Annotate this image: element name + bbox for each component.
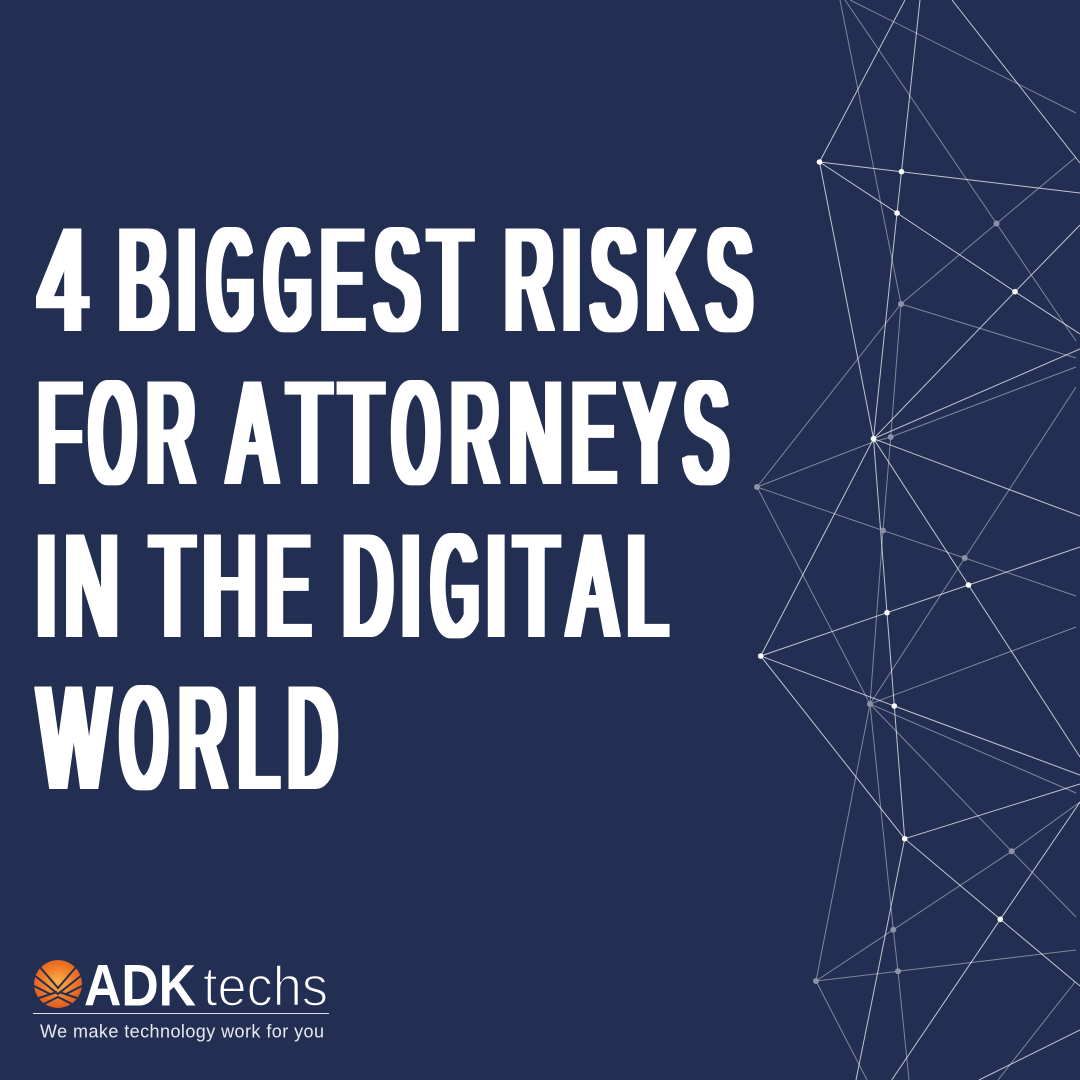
title line 1: K: [646, 198, 695, 361]
title line 2: T: [288, 351, 330, 514]
white nodes: [758, 159, 1018, 922]
wordmark: ADK: [84, 954, 196, 1018]
title line 3: T: [515, 504, 558, 667]
title line 2: E: [572, 351, 615, 514]
title line 1: G: [265, 198, 311, 361]
title line 2: R: [147, 351, 195, 514]
title line 3: L: [627, 504, 667, 667]
faint network lines: [757, 0, 1080, 1080]
title line 3: H: [203, 504, 256, 667]
network graphic: [754, 0, 1080, 1080]
title line 1: 4: [39, 198, 87, 361]
title line 3: T: [151, 504, 194, 667]
title line 1: S: [591, 198, 636, 361]
title line 2: F: [38, 351, 80, 514]
title line 2: R: [451, 351, 499, 514]
title line 3: G: [432, 504, 478, 667]
bright network lines: [761, 0, 1080, 1080]
title line 3: [36, 504, 670, 667]
tagline: We make technology work for you: [40, 1022, 324, 1042]
title line 1: S: [375, 198, 419, 361]
title line 3: D: [343, 504, 392, 667]
title line 3: I: [486, 504, 507, 667]
title line 2: T: [340, 351, 382, 514]
title line 1: I: [177, 198, 197, 361]
title line 1: E: [321, 198, 364, 361]
title line 4: W: [39, 656, 109, 819]
title line 4: R: [179, 656, 227, 819]
title line 1: I: [562, 198, 581, 361]
title line 2: S: [684, 351, 728, 514]
title line 1: T: [429, 198, 472, 361]
tagline rule: [33, 1013, 329, 1014]
title line 1: [36, 198, 754, 361]
title line 3: N: [65, 504, 119, 667]
icon: sun emblem: [32, 960, 84, 1008]
logo: [32, 954, 329, 1042]
title line 4: D: [288, 656, 336, 819]
title line 2: Y: [626, 351, 673, 514]
title line 2: N: [509, 351, 562, 514]
title line 3: E: [267, 504, 309, 667]
grey nodes: [754, 220, 1015, 984]
title line 1: S: [707, 198, 751, 361]
title line 2: O: [90, 351, 135, 514]
title line 4: [34, 656, 338, 819]
title line 4: O: [121, 656, 167, 819]
wordmark light: techs: [203, 954, 328, 1018]
title line 3: I: [36, 504, 57, 667]
title line 2: O: [393, 351, 439, 514]
title line 2: A: [229, 351, 276, 514]
title line 4: L: [238, 656, 278, 819]
title line 1: B: [118, 198, 169, 361]
title line 3: I: [401, 504, 421, 667]
title line 2: [38, 351, 730, 514]
title line 1: G: [208, 198, 253, 361]
title line 3: A: [569, 504, 616, 667]
title line 1: R: [504, 198, 553, 361]
